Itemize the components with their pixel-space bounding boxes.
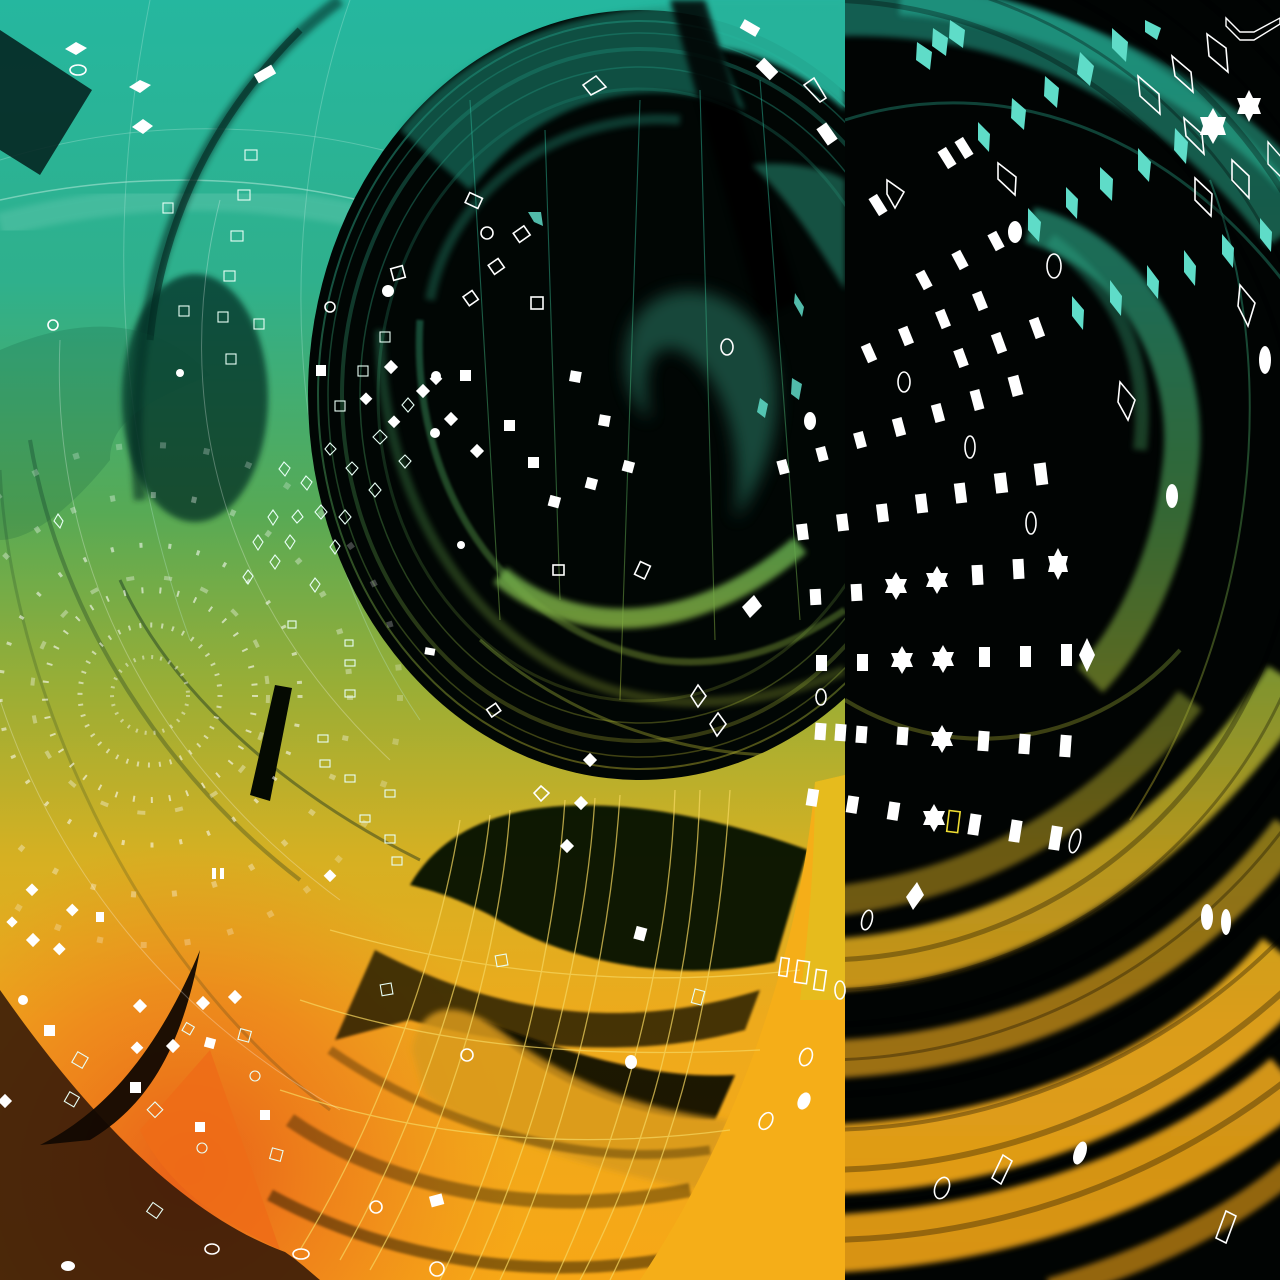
dark arcs on left: [0, 0, 420, 1110]
translucent band left centre: [0, 326, 134, 540]
dark concentric streak texture: [845, 0, 1280, 1243]
white marks lower left: [133, 999, 147, 1013]
amber bands lower centre: [412, 1010, 730, 1190]
pale light bands upper left: [0, 0, 500, 720]
white ovals: [1166, 484, 1178, 508]
dark teal upper swirl: [400, 5, 745, 190]
black right panel: [845, 0, 1280, 1280]
white marks lower centre: [583, 753, 597, 767]
black central swirl: [308, 10, 845, 780]
teal streak right of swirl: [752, 164, 845, 290]
dashed radial rings left: [0, 445, 400, 945]
orange glow lower left: [0, 850, 640, 1280]
white squares centre: [569, 370, 582, 383]
swirl edge streaks: [317, 20, 845, 770]
teal filled markers top right: [528, 20, 1272, 418]
dark patch top left: [0, 30, 92, 175]
panel: left and centre artwork: [0, 0, 972, 1280]
coloured arcs on right: [760, 0, 1280, 1280]
thin vertical rule lines lower centre: [280, 790, 800, 1280]
small outline squares left arc: [54, 150, 705, 1218]
bright amber wedge: [640, 775, 845, 1280]
thin pale arcs left: [0, 200, 390, 1110]
yellow wedge highlight: [800, 775, 845, 1000]
star markers: [885, 90, 1261, 832]
panel: right half artwork: [845, 0, 1280, 1280]
orange wedge near corner: [174, 1050, 280, 1250]
green outer arc streaks: [380, 80, 845, 755]
black wedge lower centre: [480, 1020, 735, 1120]
teal top wedge: [702, 17, 845, 112]
second black band: [335, 950, 760, 1048]
white diamonds right: [65, 42, 1095, 910]
inner teal wisp: [625, 291, 777, 520]
black diagonal slash upper swirl: [667, 0, 744, 116]
dark streaks bottom centre: [270, 1050, 710, 1267]
bottom left dark corner: [0, 990, 320, 1280]
black strip: [250, 685, 292, 801]
dark blob left centre: [122, 274, 268, 522]
green inner arc: [500, 545, 800, 619]
lower black blob: [410, 805, 808, 971]
dark arc sliver: [40, 950, 200, 1145]
